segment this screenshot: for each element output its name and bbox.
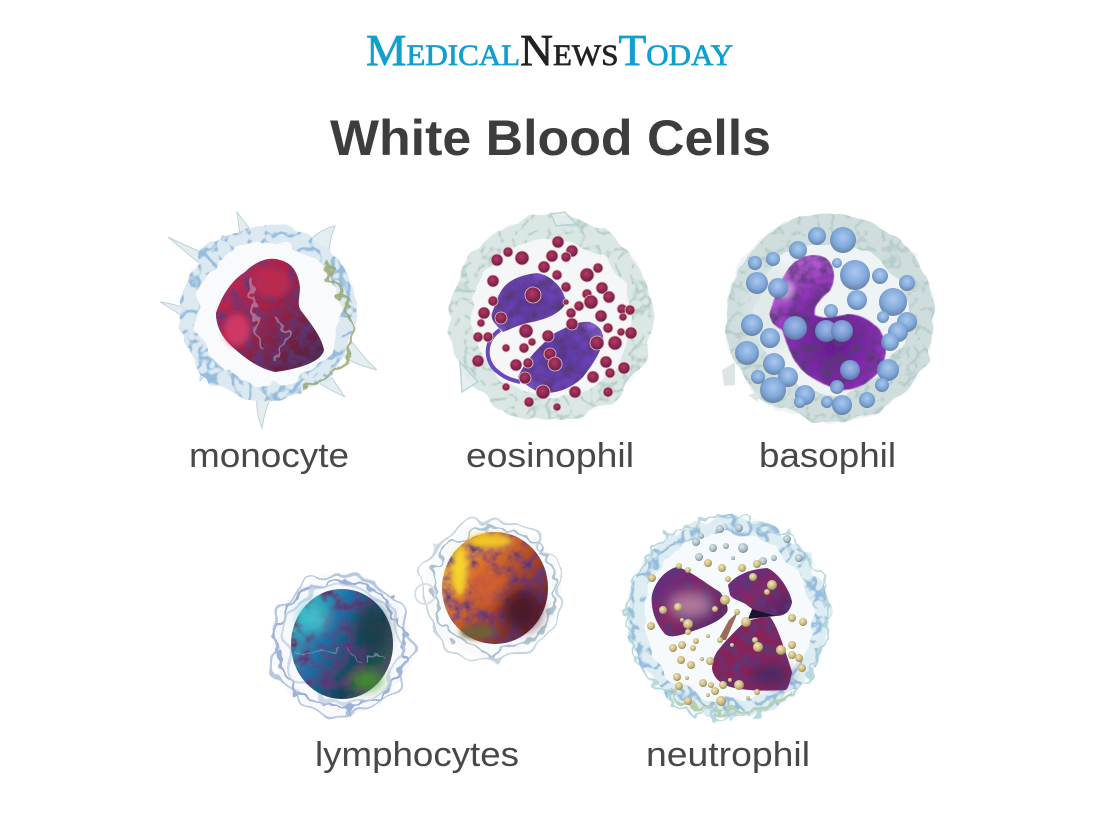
- orange lymphocyte lacy membrane: [415, 520, 562, 660]
- eosinophil nucleus: [488, 273, 603, 393]
- label: eosinophil: eosinophil: [466, 437, 634, 475]
- neutrophil granules: grey-blue: [692, 524, 803, 565]
- blue lymphocyte lacy membrane: [271, 575, 411, 715]
- monocyte nucleus: [216, 259, 324, 372]
- neutrophil membrane: [628, 517, 828, 717]
- cell: neutrophil: [628, 517, 828, 717]
- cell: lymphocyte blue: [271, 575, 411, 715]
- title: White Blood Cells: [330, 110, 771, 166]
- label: lymphocytes: lymphocytes: [315, 736, 519, 774]
- cell: basophil: [722, 214, 934, 422]
- logo: Medical News Today: MEDICALNEWSTODAY: [366, 26, 733, 75]
- monocyte membrane with spikes: [160, 212, 377, 428]
- label: neutrophil: neutrophil: [646, 736, 810, 774]
- orange lymphocyte nucleus: [442, 532, 548, 644]
- cell: monocyte: [160, 212, 377, 428]
- label: basophil: basophil: [759, 437, 896, 475]
- basophil granules: [735, 227, 917, 415]
- basophil membrane: [722, 214, 934, 422]
- neutrophil nucleus lobes: [652, 567, 792, 691]
- cell: lymphocyte orange: [415, 520, 562, 660]
- basophil nucleus: [770, 255, 886, 390]
- eosinophil membrane: [451, 212, 651, 418]
- label: monocyte: monocyte: [189, 437, 349, 475]
- neutrophil granules: tan: [647, 559, 807, 706]
- cell: eosinophil: [451, 212, 651, 418]
- eosinophil granules: [472, 236, 637, 411]
- blue lymphocyte nucleus: [291, 589, 393, 699]
